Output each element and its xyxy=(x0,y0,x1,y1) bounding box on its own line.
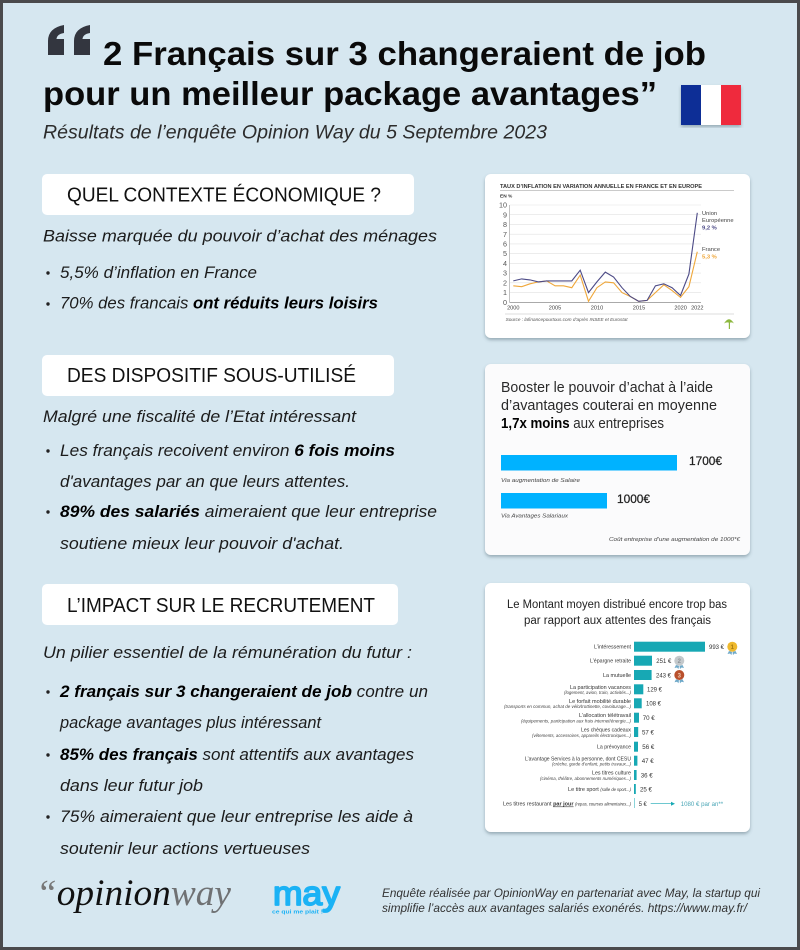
arrow: per year xyxy=(651,802,675,806)
row: services à la personne: L’avantage Services à la personne, dont CESU xyxy=(525,756,631,762)
row: chèques cadeaux: 57 € xyxy=(642,729,654,736)
title line 1: 2 Français sur 3 changeraient de job xyxy=(103,36,706,73)
x axis labels: 2000 xyxy=(507,306,520,312)
bar: avantages: 1000€ xyxy=(617,492,650,506)
series label: Union Européenne: Européenne xyxy=(702,218,734,224)
yearly amount: 1080 € par an** xyxy=(681,801,724,808)
footer note: simplifie l’accès aux avantages salariés exonérés. https://www.may.fr/ xyxy=(382,901,749,915)
intro text: dispositif: Malgré une fiscalité de l’Etat intéressant xyxy=(43,407,357,426)
x axis labels: 2020 xyxy=(674,306,687,312)
series label: France: France xyxy=(702,247,720,253)
series label: Union Européenne: Union xyxy=(702,211,717,217)
row: participation vacances: La participation vacances xyxy=(570,685,631,691)
row: chèques cadeaux xyxy=(532,727,654,738)
bullet: 89% des salariés xyxy=(46,502,437,553)
bullet: 85% des français: dans leur futur job xyxy=(60,776,203,795)
section: contexte économique xyxy=(42,174,438,312)
row: titres restaurant xyxy=(503,798,647,808)
row: mutuelle xyxy=(603,670,671,680)
bar chart xyxy=(503,642,737,808)
bullet: 2 français sur 3: 2 français sur 3 changeraient de job contre un xyxy=(59,682,428,701)
row: titres culture: (cinéma, théâtre, abonnements numériques...) xyxy=(540,776,632,781)
logo: may: may xyxy=(273,875,340,913)
bullet: 2 français sur 3: package avantages plus intéressant xyxy=(59,713,322,732)
bar: salaire: 1700€ xyxy=(689,454,722,468)
series label: France xyxy=(702,247,720,260)
y axis labels: 3 xyxy=(503,269,507,278)
medal: bronze: 3 xyxy=(678,673,682,679)
bullet: 85% des français: 85% des français sont attentifs aux avantages xyxy=(60,745,414,764)
row: titres restaurant: Les titres restaurant par jour (repas, courses alimentaires...) xyxy=(503,802,632,808)
bullet: 2 français sur 3 xyxy=(46,682,428,732)
panel heading: par rapport aux attentes des français xyxy=(524,615,711,627)
panel text: d’avantages couterai en moyenne xyxy=(501,397,717,414)
y axis labels: 8 xyxy=(503,220,507,229)
row: chèques cadeaux: (vêtements, accessoires, appareils électroniques...) xyxy=(532,733,632,738)
row: forfait mobilité: 108 € xyxy=(646,701,661,708)
row: forfait mobilité xyxy=(504,698,661,709)
panel heading xyxy=(507,599,727,627)
y axis labels: 5 xyxy=(503,249,507,258)
row: titres restaurant: 5 € xyxy=(639,801,647,808)
panel: average amounts xyxy=(485,583,750,832)
row: mutuelle: 243 € xyxy=(656,672,671,679)
logo: may: ce qui me plait ! xyxy=(272,910,323,916)
y axis labels: 2 xyxy=(503,278,507,287)
title block xyxy=(43,25,706,144)
intro text: contexte: Baisse marquée du pouvoir d’achat des ménages xyxy=(43,226,438,246)
x axis labels: 2022 xyxy=(691,306,704,312)
series label: Union Européenne xyxy=(702,211,734,232)
series label: France: 5,3 % xyxy=(702,254,717,260)
medal: silver: 2 xyxy=(678,659,682,665)
section: impact sur le recrutement xyxy=(42,584,428,858)
y axis labels xyxy=(499,201,507,307)
medal: gold: 1 xyxy=(731,645,735,651)
chart title: TAUX D’INFLATION EN VARIATION ANNUELLE EN FRANCE ET EN EUROPE xyxy=(500,184,702,190)
y axis labels: 6 xyxy=(503,240,507,248)
row: participation vacances: 129 € xyxy=(647,687,662,694)
section: dispositif sous-utilisé xyxy=(42,355,437,553)
bullet: 6 fois moins xyxy=(46,441,395,491)
row: titres culture xyxy=(540,770,653,781)
row: épargne retraite: 251 € xyxy=(656,658,672,665)
footer note: Enquête réalisée par OpinionWay en partenariat avec May, la startup qui xyxy=(382,886,760,900)
bar: salaire xyxy=(501,454,722,484)
row: épargne retraite xyxy=(590,656,672,666)
bullet: 6 fois moins: d'avantages par an que leurs attentes. xyxy=(60,472,350,491)
row: participation vacances xyxy=(564,684,662,695)
row: forfait mobilité: (transports en commun, achat de vélo/trottinette, covoiturage...) xyxy=(504,704,632,709)
line: France xyxy=(513,252,697,301)
subtitle: Résultats de l’enquête Opinion Way du 5 Septembre 2023 xyxy=(43,122,547,144)
heading box: dispositif xyxy=(42,355,394,396)
row: titre sport xyxy=(568,784,652,794)
row: allocation télétravail: L’allocation télétravail xyxy=(579,713,631,719)
bullet: loisirs: 70% des francais ont réduits leurs loisirs xyxy=(60,294,378,312)
y axis labels: 0 xyxy=(503,298,507,307)
x axis labels: 2005 xyxy=(549,306,561,312)
panel text xyxy=(501,379,717,432)
x axis labels xyxy=(507,306,704,312)
medal: bronze xyxy=(674,670,684,683)
bullet: 89% des salariés: 89% des salariés aimeraient que leur entreprise xyxy=(60,502,437,521)
row: services à la personne: (crèche, garde d’enfant, petits travaux...) xyxy=(552,762,632,767)
bar: avantages xyxy=(501,492,650,520)
bullet: 75% xyxy=(46,807,413,858)
intro text: recrutement: Un pilier essentiel de la rémunération du futur : xyxy=(43,643,412,662)
source note: Source : lafinancepourtous.com d’après INSEE et Eurostat xyxy=(506,317,628,322)
medal: gold xyxy=(727,642,737,655)
icon: opening quote xyxy=(48,25,90,55)
panel heading: Le Montant moyen distribué encore trop bas xyxy=(507,599,727,611)
bullet: inflation: 5,5% d’inflation en France xyxy=(60,263,257,282)
row: titre sport: 25 € xyxy=(640,786,652,793)
x axis labels: 2010 xyxy=(591,306,603,312)
panel: inflation chart xyxy=(485,174,750,338)
y axis labels: 4 xyxy=(503,259,507,268)
row: épargne retraite: L’épargne retraite xyxy=(590,659,631,665)
heading box: contexte xyxy=(42,174,414,215)
title line 2: pour un meilleur package avantages” xyxy=(43,76,657,113)
footnote: Coût entreprise d’une augmentation de 1000*€ xyxy=(609,537,741,543)
panel text: 1,7x moins aux entreprises xyxy=(501,415,664,432)
bullet: 89% des salariés: soutiene mieux leur pouvoir d'achat. xyxy=(60,534,344,553)
y axis labels: 9 xyxy=(503,210,507,219)
row: intéressement xyxy=(594,642,724,652)
row: prévoyance: 56 € xyxy=(642,744,655,751)
row: allocation télétravail: (équipements, participation aux frais internet/énergie...) xyxy=(521,719,632,724)
footer xyxy=(36,873,760,916)
icon: French flag xyxy=(681,85,741,125)
row: titre sport: Le titre sport (salle de sport...) xyxy=(568,787,632,793)
panel text: Booster le pouvoir d’achat à l’aide xyxy=(501,379,713,396)
bullet: 75%: 75% aimeraient que leur entreprise les aide à xyxy=(60,807,413,826)
line: Union Européenne xyxy=(513,213,697,301)
bar: salaire: Via augmentation de Salaire xyxy=(501,478,580,484)
y axis labels: 7 xyxy=(503,230,507,239)
heading box: dispositif: DES DISPOSITIF SOUS-UTILISÉ xyxy=(67,364,356,387)
footer note xyxy=(382,886,760,915)
axis unit: EN % xyxy=(500,194,513,200)
row: chèques cadeaux: Les chèques cadeaux xyxy=(581,728,631,734)
bar: avantages: Via Avantages Salariaux xyxy=(501,514,568,520)
y axis labels: 10 xyxy=(499,201,507,210)
heading box: recrutement xyxy=(42,584,398,625)
row: titres culture: Les titres culture xyxy=(592,770,631,776)
bullet: 75%: soutenir leur actions vertueuses xyxy=(60,839,311,858)
row: forfait mobilité: Le forfait mobilité durable xyxy=(569,699,631,705)
row: services à la personne xyxy=(525,756,654,767)
icon: green umbrella xyxy=(724,319,734,329)
row: services à la personne: 47 € xyxy=(642,758,654,765)
row: allocation télétravail xyxy=(521,713,655,724)
row: prévoyance: La prévoyance xyxy=(597,745,631,751)
heading box: contexte: QUEL CONTEXTE ÉCONOMIQUE ? xyxy=(67,184,381,206)
panel: cost comparison xyxy=(485,364,750,555)
y axis labels: 1 xyxy=(503,288,507,297)
x axis labels: 2015 xyxy=(633,306,645,312)
series label: Union Européenne: 9,2 % xyxy=(702,226,717,232)
bullet: 85% des français xyxy=(46,745,414,795)
row: participation vacances: (logement, avion, train, activités...) xyxy=(564,690,632,695)
row: titres culture: 36 € xyxy=(641,772,653,779)
medal: silver xyxy=(674,656,684,669)
heading box: recrutement: L’IMPACT SUR LE RECRUTEMENT xyxy=(67,595,375,617)
bullet: 6 fois moins: Les français recoivent environ 6 fois moins xyxy=(60,441,395,460)
row: intéressement: 993 € xyxy=(709,644,724,651)
row: intéressement: L’intéressement xyxy=(594,645,631,651)
row: prévoyance xyxy=(597,742,655,752)
row: allocation télétravail: 70 € xyxy=(643,715,655,722)
logo: opinionway: “opinionway xyxy=(36,873,232,914)
row: mutuelle: La mutuelle xyxy=(603,673,631,679)
